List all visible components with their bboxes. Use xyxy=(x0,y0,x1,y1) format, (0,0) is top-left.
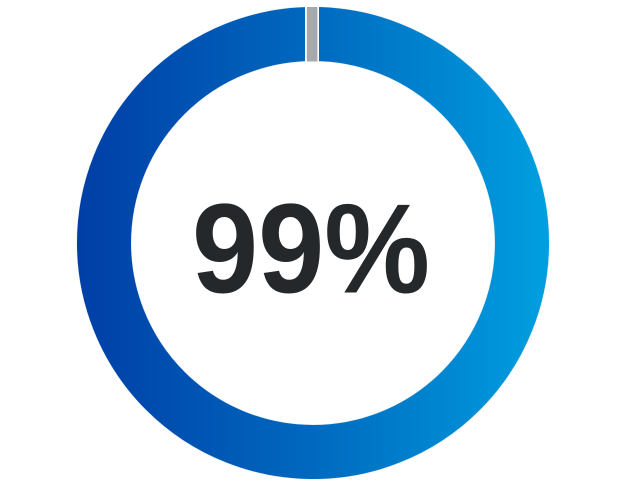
ring segment: remaining 1% grey xyxy=(305,5,319,64)
center value: 99% xyxy=(192,178,430,320)
ring segment: 99% blue gradient xyxy=(104,34,522,452)
